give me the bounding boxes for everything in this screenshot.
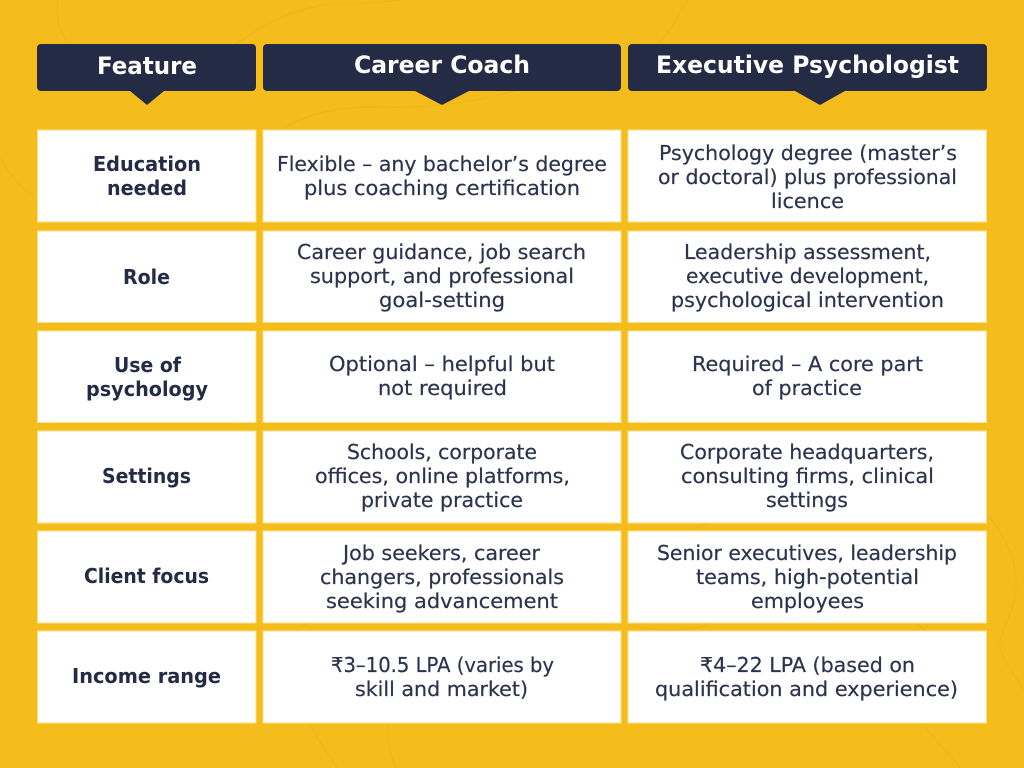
feature cell: Settings — [102, 464, 191, 488]
executive psychologist cell — [628, 331, 986, 422]
executive psychologist cell — [628, 531, 986, 623]
career coach cell — [263, 331, 621, 422]
career coach cell: support, and professional — [310, 264, 574, 288]
career coach cell: goal-setting — [379, 288, 505, 312]
row: Use of psychology — [38, 331, 986, 422]
feature cell — [38, 130, 256, 222]
executive psychologist cell: licence — [771, 189, 844, 213]
career coach cell: seeking advancement — [326, 589, 558, 613]
executive psychologist cell — [628, 231, 986, 322]
feature cell — [38, 331, 256, 422]
row: Role — [38, 231, 986, 322]
executive psychologist cell: ₹4–22 LPA (based on — [700, 653, 915, 677]
executive psychologist cell: Psychology degree (master’s — [659, 141, 957, 165]
career coach cell: Job seekers, career — [341, 541, 541, 565]
header: Feature: Feature — [97, 52, 197, 80]
header: Career Coach: Career Coach — [354, 51, 530, 79]
executive psychologist cell: teams, high-potential — [696, 565, 919, 589]
executive psychologist cell — [628, 631, 986, 723]
executive psychologist cell: settings — [766, 488, 848, 512]
career coach cell: ₹3–10.5 LPA (varies by — [331, 653, 554, 677]
career coach cell — [263, 431, 621, 523]
executive psychologist cell: Required – A core part — [692, 352, 923, 376]
career coach cell: Optional – helpful but — [329, 352, 555, 376]
career coach cell — [263, 631, 621, 723]
executive psychologist cell: Leadership assessment, — [684, 240, 931, 264]
feature cell: Role — [123, 265, 170, 289]
career coach cell: Schools, corporate — [347, 440, 537, 464]
feature cell: Income range — [72, 664, 221, 688]
feature cell — [38, 631, 256, 723]
header: Career Coach — [263, 44, 621, 105]
career coach cell: Career guidance, job search — [297, 240, 586, 264]
header: Executive Psychologist — [628, 44, 987, 105]
executive psychologist cell: Corporate headquarters, — [680, 440, 934, 464]
feature cell: Education — [93, 152, 201, 176]
career coach cell: private practice — [361, 488, 523, 512]
executive psychologist cell — [628, 130, 986, 222]
executive psychologist cell: of practice — [752, 376, 862, 400]
career coach cell: Flexible – any bachelor’s degree — [277, 152, 607, 176]
executive psychologist cell: Senior executives, leadership — [657, 541, 957, 565]
feature cell: Client focus — [84, 564, 209, 588]
executive psychologist cell: employees — [751, 589, 864, 613]
executive psychologist cell: executive development, — [686, 264, 929, 288]
career coach cell — [263, 130, 621, 222]
row: Settings — [38, 431, 986, 523]
header: Feature — [37, 44, 256, 105]
career coach cell — [263, 531, 621, 623]
header: Executive Psychologist: Executive Psychologist — [656, 51, 959, 79]
row: Education needed — [38, 130, 986, 222]
career coach cell: plus coaching certification — [304, 176, 580, 200]
feature cell: psychology — [86, 377, 208, 401]
career coach cell: skill and market) — [355, 677, 528, 701]
executive psychologist cell: qualification and experience) — [655, 677, 958, 701]
feature cell — [38, 231, 256, 322]
feature cell — [38, 531, 256, 623]
executive psychologist cell: or doctoral) plus professional — [658, 165, 957, 189]
feature cell: needed — [107, 176, 187, 200]
career coach cell: not required — [378, 376, 507, 400]
career coach cell: changers, professionals — [320, 565, 564, 589]
executive psychologist cell: consulting firms, clinical — [681, 464, 934, 488]
career coach cell: offices, online platforms, — [315, 464, 570, 488]
feature cell — [38, 431, 256, 523]
row: Client focus — [38, 531, 986, 623]
executive psychologist cell: psychological intervention — [671, 288, 944, 312]
row: Income range — [38, 631, 986, 723]
executive psychologist cell — [628, 431, 986, 523]
career coach cell — [263, 231, 621, 322]
feature cell: Use of — [114, 353, 182, 377]
